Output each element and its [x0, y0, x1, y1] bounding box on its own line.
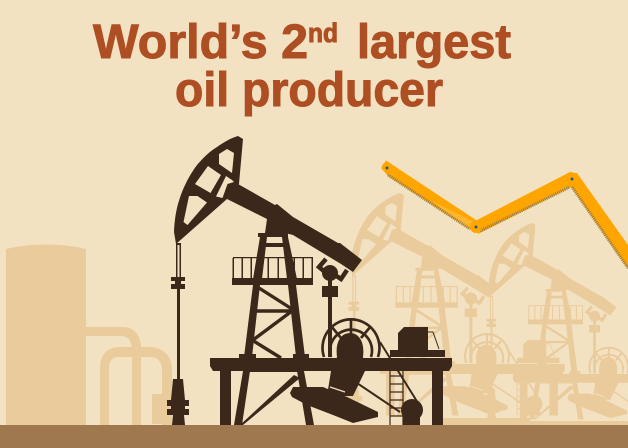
title: largest	[357, 16, 511, 69]
ruler segment 2	[473, 172, 577, 234]
folding ruler line chart	[381, 160, 628, 269]
storage tank and pipes	[6, 244, 172, 425]
ruler hinges	[382, 162, 578, 233]
main pump jack	[167, 136, 452, 425]
title	[93, 16, 511, 117]
ruler segment 3	[567, 172, 628, 269]
background pump jack near	[345, 193, 565, 425]
ruler segment 1	[381, 160, 479, 231]
background pump jack far	[470, 223, 628, 425]
title: nd	[308, 18, 338, 48]
title: World’s 2	[93, 16, 308, 69]
ground	[0, 425, 628, 448]
title: oil producer	[175, 64, 443, 117]
